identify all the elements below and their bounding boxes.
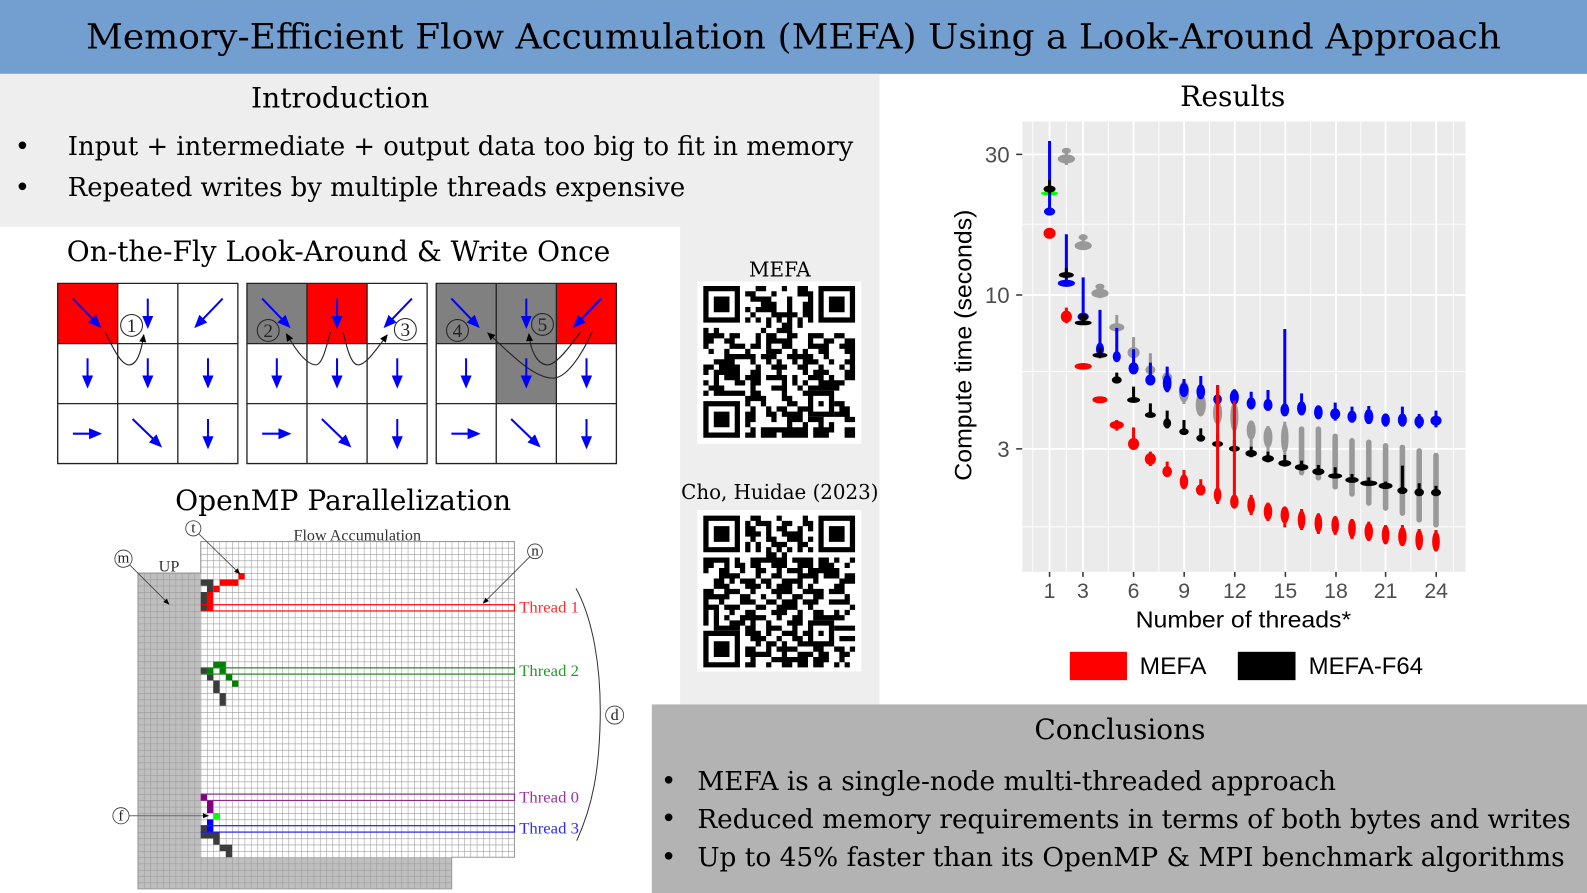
bullet list: introduction: • <box>15 132 30 162</box>
callout: f <box>113 807 208 824</box>
heading: conclusions: Conclusions <box>1034 713 1205 746</box>
callout: t: t <box>191 519 196 536</box>
y axis labels: 3 <box>997 437 1010 462</box>
bullet list: conclusions: MEFA is a single-node multi-threaded approach <box>697 767 1336 797</box>
callout: n <box>483 542 542 603</box>
y axis title: Compute time (seconds) <box>951 210 978 481</box>
grid panel 2 <box>247 283 427 464</box>
axis ticks <box>1016 154 1436 577</box>
series: green single value <box>1041 191 1058 196</box>
series: gray benchmark <box>1058 148 1436 525</box>
bullet list: introduction <box>15 132 853 203</box>
callout: thread 0: Thread 0 <box>519 789 579 807</box>
callout: thread 3: Thread 3 <box>519 819 579 837</box>
chart legend: MEFA <box>1140 653 1207 680</box>
y axis labels: 30 <box>985 142 1010 167</box>
heading: MEFA QR: MEFA <box>749 257 812 281</box>
series: MEFA <box>1044 228 1439 551</box>
diagram: OpenMP grid <box>113 519 624 889</box>
heading: introduction: Introduction <box>251 81 429 114</box>
panel: conclusions <box>652 704 1587 893</box>
callout: t <box>186 519 240 574</box>
callout: m: m <box>118 550 130 567</box>
grid panel 3: 4 <box>453 321 463 342</box>
bullet list: introduction: Repeated writes by multiple threads expensive <box>68 173 685 203</box>
x axis labels: 9 <box>1178 579 1190 603</box>
chart legend <box>1070 652 1423 680</box>
y axis labels: 10 <box>985 283 1010 308</box>
title banner <box>0 0 1587 74</box>
x axis title: Number of threads* <box>1136 607 1351 633</box>
grid panel 2: 3 <box>401 320 410 341</box>
heading: OpenMP: OpenMP Parallelization <box>175 484 511 517</box>
x axis labels <box>1044 579 1448 603</box>
x axis labels: 18 <box>1324 579 1348 603</box>
callout: n: n <box>531 542 539 559</box>
flow accumulation region <box>201 541 514 857</box>
x axis labels: 15 <box>1274 579 1297 603</box>
bullet list: conclusions: • <box>661 804 676 834</box>
brace <box>576 588 600 841</box>
bullet list: conclusions: Up to 45% faster than its OpenMP & MPI benchmark algorithms <box>697 843 1565 873</box>
threads cells <box>201 576 514 854</box>
series: blue benchmark <box>1045 141 1441 428</box>
diagram labels: Flow Accumulation <box>294 526 421 544</box>
heading: citation QR: Cho, Huidae (2023) <box>681 480 879 504</box>
UP region <box>138 573 452 889</box>
diagram: OpenMP grid: UP <box>159 557 179 575</box>
QR code: MEFA <box>697 281 861 444</box>
grid panel 2: 2 <box>263 321 273 342</box>
heading: results: Results <box>1180 80 1285 113</box>
bullet list: introduction: • <box>15 173 30 203</box>
chart: compute time violin plot <box>951 121 1466 633</box>
grid panel 1: 1 <box>127 316 136 337</box>
bullet list: conclusions: • <box>661 766 676 796</box>
x axis labels: 21 <box>1374 579 1397 603</box>
bullet list: conclusions <box>661 766 1571 873</box>
callout: m <box>115 550 169 604</box>
bullet list: conclusions: • <box>661 842 676 872</box>
plot background <box>1022 121 1466 572</box>
x axis labels: 12 <box>1223 579 1247 603</box>
chart legend: MEFA-F64 <box>1309 653 1423 680</box>
bullet list: introduction: Input + intermediate + output data too big to fit in memory <box>68 132 853 162</box>
panel: introduction <box>0 74 880 704</box>
bullet list: conclusions: Reduced memory requirements in terms of both bytes and writes <box>697 805 1571 835</box>
QR code: citation <box>697 510 861 672</box>
callout: thread 1: Thread 1 <box>519 599 579 617</box>
title banner: Memory-Efficient Flow Accumulation (MEFA) Using a Look-Around Approach <box>86 18 1501 58</box>
callout: d <box>606 706 624 724</box>
callout: d: d <box>611 706 619 724</box>
diagram: look-around grids <box>58 283 617 464</box>
y axis labels <box>985 142 1010 462</box>
heading: look-around: On-the-Fly Look-Around & Write Once <box>67 235 610 268</box>
x axis labels: 1 <box>1044 579 1055 603</box>
grid lines <box>1022 121 1466 572</box>
grid panel 1 <box>58 283 238 464</box>
callout: f: f <box>118 807 124 824</box>
grid panel 3 <box>436 283 617 464</box>
grid panel 3: 5 <box>538 315 547 336</box>
x axis labels: 3 <box>1077 579 1089 603</box>
callout: thread 2: Thread 2 <box>519 662 579 680</box>
x axis labels: 24 <box>1424 579 1448 603</box>
series: MEFA-F64 <box>1044 180 1441 496</box>
x axis labels: 6 <box>1128 579 1139 603</box>
